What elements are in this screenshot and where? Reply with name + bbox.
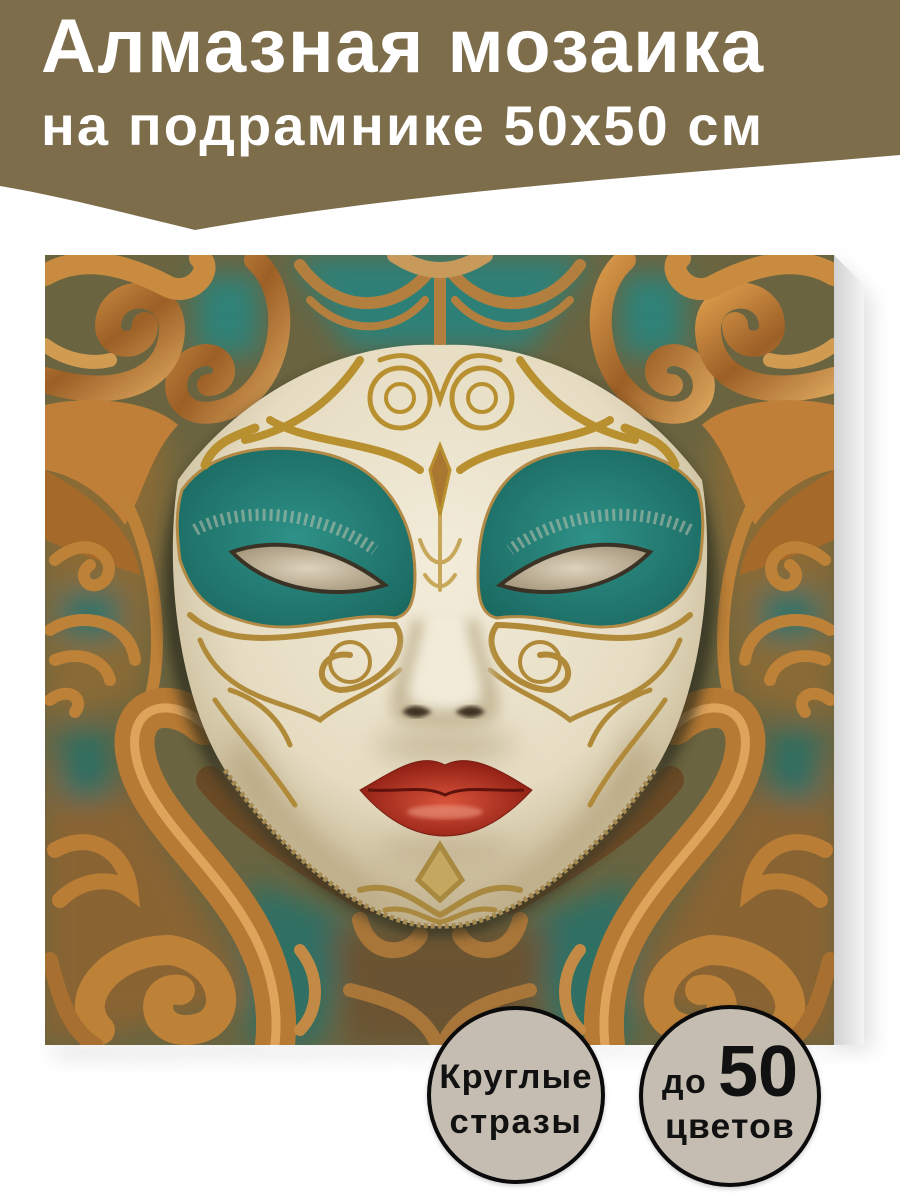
banner background [0,0,900,230]
badge text do: до [662,1063,707,1101]
badge: up to 50 colours [639,1005,821,1187]
mask face [173,345,707,926]
background base [45,255,834,1045]
mask edge trim [225,770,655,926]
gold forehead filigree [205,356,675,590]
gold cheek filigree right [490,615,690,805]
left upper scrolls [45,258,279,413]
badge text line 2: стразы [450,1103,582,1141]
right teal eye area [478,448,703,627]
badge number 50: 50 [718,1032,798,1112]
face shading [230,720,650,910]
badge text line 1: Круглые [439,1058,593,1096]
chin ornament [360,845,520,922]
right eye [500,515,690,592]
title: Алмазная мозаика [41,4,765,89]
top ornament [300,255,580,350]
gold cheek filigree left [190,615,400,805]
subtitle: на подрамнике 50х50 см [41,94,764,157]
right feather leaves [702,400,834,575]
side scroll ornaments [50,500,830,712]
canvas side shadow [55,255,878,1062]
badge text colours: цветов [665,1106,795,1146]
lips [360,761,532,836]
left teal eye area [177,448,415,627]
background colour patches [45,255,834,1045]
nose [391,610,499,730]
painting: venetian mask [45,255,834,1045]
badge: round rhinestones [427,1006,605,1184]
left eye [195,515,385,592]
left feather leaves [45,400,178,575]
right upper scrolls [601,258,834,413]
lower big swirls [50,708,830,1045]
mask shadow [163,355,717,936]
